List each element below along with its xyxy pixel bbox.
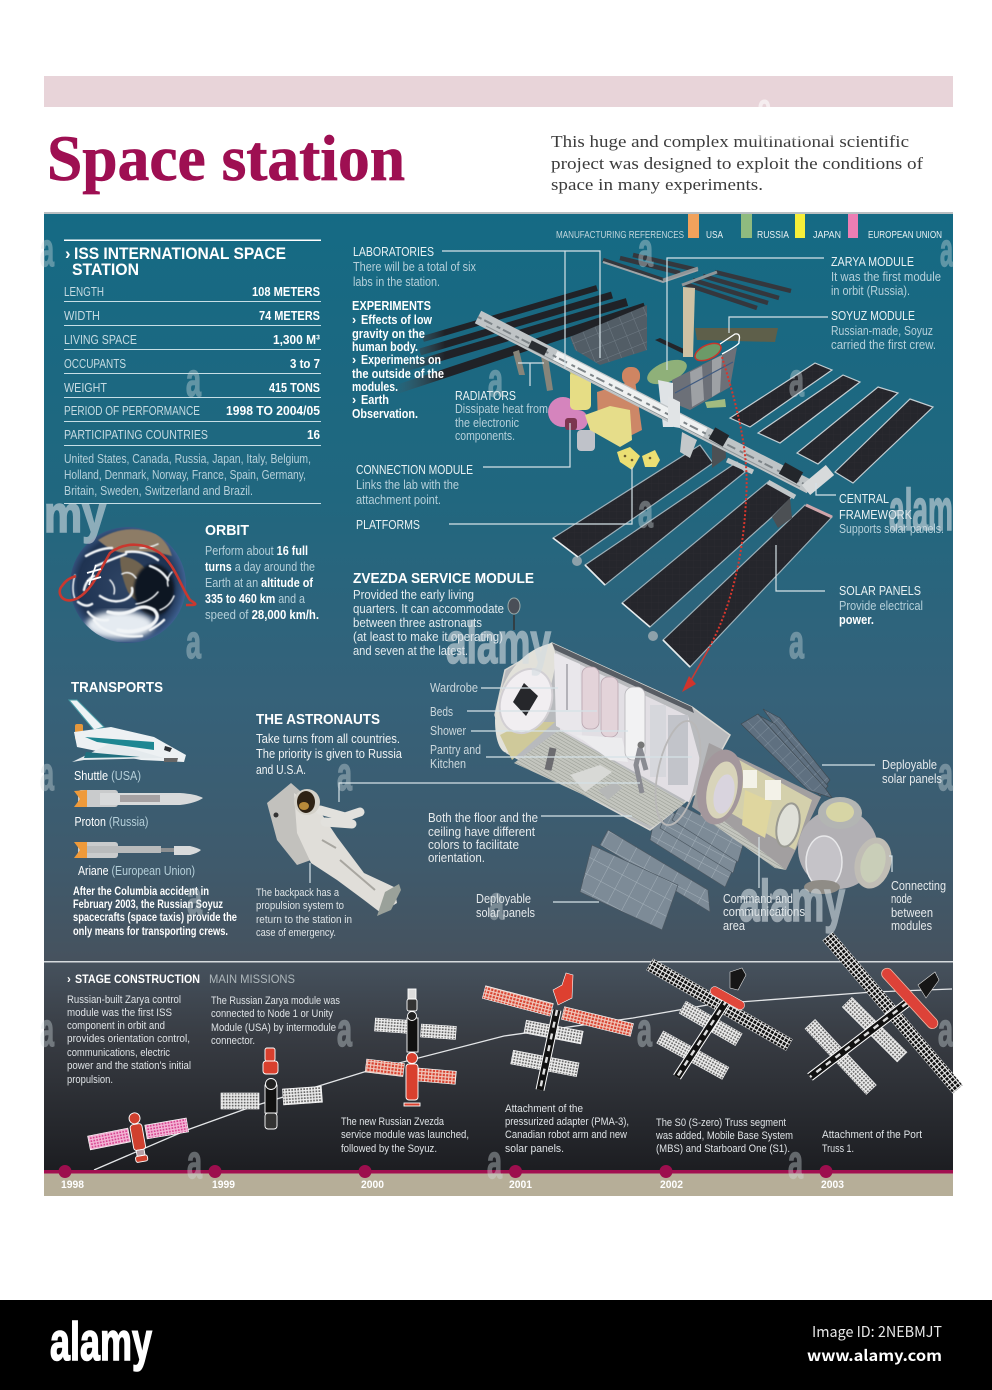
text: 2003 mission — [822, 1129, 922, 1155]
Zvezda labels and leaders: Wardrobe — [430, 681, 478, 695]
legend: manufacturing references: MANUFACTURING REFERENCES — [556, 230, 684, 241]
year labels: 1998 — [61, 1179, 84, 1191]
label: platforms: PLATFORMS — [356, 517, 420, 532]
mast — [683, 287, 695, 357]
label: experiments: › — [352, 313, 356, 327]
label: solar panels: SOLAR PANELS — [839, 583, 921, 598]
year labels — [61, 1179, 844, 1191]
astronauts heading and text: THE ASTRONAUTS — [256, 711, 380, 728]
label: Zvezda heading and text: between three astronauts — [353, 616, 482, 630]
watermarks: a — [938, 1003, 953, 1056]
label: radiators: Dissipate heat from — [455, 402, 548, 416]
astronauts heading and text: and U.S.A. — [256, 763, 306, 777]
label: connecting node: modules — [891, 919, 932, 933]
label: experiments — [352, 299, 444, 421]
astronauts heading and text: Take turns from all countries. — [256, 732, 400, 746]
length row: 108 METERS — [252, 285, 320, 299]
countries row — [64, 428, 320, 442]
label: connection module: CONNECTION MODULE — [356, 462, 473, 477]
text: backpack: The backpack has a — [256, 887, 340, 899]
icon: ISS marker — [87, 565, 101, 585]
array connectors — [712, 436, 792, 528]
watermarks: a — [757, 82, 772, 135]
mini station 2002 — [646, 959, 792, 1079]
text: Columbia note: February 2003, the Russian Soyuz — [73, 899, 223, 911]
text: 2000 mission: The new Russian Zvezda — [341, 1116, 445, 1128]
legend: manufacturing references: EUROPEAN UNION — [868, 230, 942, 241]
shower — [625, 687, 645, 760]
label: experiments: the outside of the — [352, 367, 444, 381]
label: experiments: › — [352, 393, 356, 407]
astronaut leader lines — [310, 783, 640, 883]
watermarks: a — [637, 1003, 652, 1056]
label: floor and ceiling — [428, 811, 538, 865]
watermarks: a — [187, 871, 202, 924]
label: Zvezda heading and text: ZVEZDA SERVICE MODULE — [353, 570, 534, 587]
label: connecting node — [891, 879, 946, 933]
occupants row: 3 to 7 — [290, 357, 320, 371]
label: soyuz: Russian-made, Soyuz — [831, 324, 933, 338]
label: shuttle: Shuttle (USA) — [74, 769, 141, 783]
transports heading: TRANSPORTS — [71, 679, 163, 696]
label: connecting node: Connecting — [891, 879, 946, 893]
living space row: 1,300 M³ — [273, 333, 320, 347]
countries row: 16 — [307, 428, 320, 442]
watermarks: a — [638, 223, 653, 276]
intro text: space in many experiments. — [551, 175, 763, 194]
text: 1999 mission — [211, 995, 340, 1047]
connecting node — [798, 797, 897, 894]
starboard lower solar arrays — [553, 445, 832, 667]
orbit text: Earth at an altitude of — [205, 576, 314, 590]
Zvezda labels and leaders: Pantry and — [430, 743, 481, 757]
Zvezda labels and leaders: Shower — [430, 724, 466, 738]
table heading: › — [65, 245, 70, 263]
weight row: WEIGHT — [64, 381, 107, 395]
label: solar panels: Provide electrical — [839, 599, 923, 613]
mission timeline curve — [94, 989, 952, 1170]
text: 2003 mission: Truss 1. — [822, 1143, 854, 1155]
label: floor and ceiling: colors to facilitate — [428, 838, 519, 852]
label: Zvezda heading and text: Provided the early living — [353, 588, 474, 602]
Zvezda labels and leaders: Beds — [430, 705, 453, 719]
orbit text: speed of 28,000 km/h. — [205, 608, 319, 622]
label: zarya: ZARYA MODULE — [831, 254, 914, 269]
length row: LENGTH — [64, 285, 104, 299]
upper deployable solar panels — [741, 709, 832, 798]
small seated figure — [548, 748, 553, 770]
text: 1999 mission: The Russian Zarya module was — [211, 995, 340, 1007]
starboard upper solar arrays — [730, 363, 933, 483]
watermarks: alamy — [446, 611, 551, 676]
label: radiators: components. — [455, 429, 515, 443]
header band — [44, 76, 953, 107]
text: Columbia note: spacecrafts (space taxis) provide the — [73, 912, 237, 924]
stage construction heading — [67, 972, 295, 986]
orbit path — [60, 545, 195, 605]
watermarks: a — [789, 353, 804, 406]
floor — [514, 730, 685, 827]
label: zarya: It was the first module — [831, 270, 941, 284]
text: 1999 mission: Module (USA) by intermodule — [211, 1022, 336, 1034]
label: central framework: CENTRAL — [839, 491, 889, 506]
length row — [64, 285, 320, 299]
label: laboratories: LABORATORIES — [353, 244, 434, 259]
Zarya green module — [644, 355, 690, 389]
label: Zvezda heading and text: and seven at the latest. — [353, 644, 468, 658]
label: deployable panels lower: solar panels — [476, 906, 535, 920]
watermarks: a — [40, 747, 54, 800]
text: 2000 mission: followed by the Soyuz. — [341, 1143, 437, 1155]
floor tables — [570, 765, 612, 792]
watermarks: a — [940, 223, 953, 276]
label: Zvezda heading and text: quarters. It can accommodate — [353, 602, 504, 616]
watermarks: a — [40, 223, 54, 276]
watermarks: my — [44, 486, 106, 544]
text: 1998 mission: propulsion. — [67, 1074, 113, 1086]
table heading — [65, 245, 286, 279]
radiators — [513, 350, 553, 391]
countries row: PARTICIPATING COUNTRIES — [64, 428, 208, 442]
text: backpack: case of emergency. — [256, 927, 336, 939]
period row — [64, 404, 320, 418]
smudge over intro — [723, 130, 847, 140]
label: experiments: human body. — [352, 340, 418, 354]
watermarks: a — [488, 353, 503, 406]
orbit text — [205, 522, 319, 622]
watermarks: alamy — [739, 869, 845, 934]
table heading: STATION — [72, 261, 139, 279]
text: backpack: propulsion system to — [256, 900, 344, 912]
label: soyuz: carried the first crew. — [831, 338, 936, 352]
width row: WIDTH — [64, 309, 100, 323]
label: zarya — [831, 254, 941, 298]
label: radiators: RADIATORS — [455, 388, 516, 403]
footer image id — [807, 1321, 942, 1366]
back panels — [695, 328, 778, 342]
text: 1999 mission: connected to Node 1 or Unity — [211, 1008, 333, 1020]
label: central framework — [839, 491, 944, 536]
text: 2001 mission: solar panels. — [505, 1143, 564, 1155]
label: Zvezda heading and text: (at least to make it operating) — [353, 630, 503, 644]
icon: ariane rocket — [74, 842, 201, 858]
label: connection module: attachment point. — [356, 493, 441, 507]
intro text — [551, 132, 923, 194]
footer logo: alamy — [50, 1312, 152, 1372]
label: deployable panels right: solar panels — [882, 772, 942, 786]
label: laboratories — [353, 244, 477, 289]
year labels: 1999 — [212, 1179, 235, 1191]
text: Columbia note: only means for transporting crews. — [73, 926, 228, 938]
beds — [582, 667, 618, 737]
red dotted guide with arrow — [682, 357, 747, 692]
footer image id: Image ID: 2NEBMJT — [812, 1321, 942, 1342]
end cap — [495, 643, 556, 753]
top solar arrays — [603, 255, 791, 308]
Soyuz module highlight — [692, 340, 724, 364]
label: floor and ceiling: orientation. — [428, 851, 485, 865]
label: experiments: modules. — [352, 380, 398, 394]
label: central framework: Supports solar panels. — [839, 522, 944, 536]
ISS station illustration — [395, 255, 933, 692]
label: floor and ceiling: ceiling have different — [428, 825, 535, 839]
icon: small probe — [508, 598, 520, 630]
lower deployable solar panels — [580, 805, 745, 930]
text: 1998 mission — [67, 994, 191, 1086]
watermarks: a — [489, 876, 504, 929]
ring joint — [647, 717, 709, 829]
orbit text: ORBIT — [205, 522, 249, 539]
label: soyuz — [831, 308, 936, 352]
orbit text: 335 to 460 km and a — [205, 592, 305, 606]
legend: manufacturing references: RUSSIA — [757, 230, 789, 241]
label: experiments: Observation. — [352, 407, 418, 421]
label: experiments: Earth — [361, 393, 389, 407]
mini station 2000 — [365, 989, 456, 1106]
mini station 2003 — [805, 932, 963, 1095]
stage section divider — [44, 961, 953, 962]
mini station 1998 — [88, 1112, 189, 1163]
Zvezda service module cutaway — [490, 643, 897, 930]
array joints — [572, 556, 658, 641]
laboratory modules — [548, 366, 660, 470]
label: solar panels: power. — [839, 613, 874, 627]
astronauts heading and text — [256, 711, 402, 777]
country list: United States, Canada, Russia, Japan, Italy, Belgium, — [64, 452, 311, 466]
label: experiments: EXPERIMENTS — [352, 299, 431, 313]
text: 1998 mission: communications, electric — [67, 1047, 170, 1059]
width row: 74 METERS — [259, 309, 320, 323]
watermarks: a — [788, 1135, 803, 1188]
text: 2002 mission: The S0 (S-zero) Truss segment — [656, 1117, 786, 1129]
label: connection module — [356, 462, 473, 507]
orbit text: Perform about 16 full — [205, 544, 308, 558]
year markers — [58, 1165, 832, 1178]
period row: PERIOD OF PERFORMANCE — [64, 404, 200, 418]
label: Zvezda heading and text — [353, 570, 534, 658]
mini station 2001 — [482, 973, 634, 1090]
country list: Britain, Sweden, Switzerland and Brazil. — [64, 484, 253, 498]
text: 1998 mission: component in orbit and — [67, 1020, 165, 1032]
label: solar panels — [839, 583, 923, 627]
label: command area: area — [723, 919, 745, 933]
text: 1998 mission: module was the first ISS — [67, 1007, 172, 1019]
occupants row — [64, 357, 320, 371]
label: radiators — [455, 388, 548, 443]
Zvezda labels and leaders — [430, 681, 892, 902]
country list: Holland, Denmark, Norway, France, Spain, Germany, — [64, 468, 306, 482]
label: connection module: Links the lab with the — [356, 478, 459, 492]
watermarks: a — [337, 747, 352, 800]
text: Columbia note — [73, 886, 237, 938]
main truss — [478, 317, 832, 517]
year labels: 2002 — [660, 1179, 683, 1191]
watermarks: a — [40, 1003, 54, 1056]
watermarks: a — [487, 1135, 502, 1188]
label: deployable panels lower: Deployable — [476, 892, 531, 906]
width row — [64, 309, 320, 323]
title: Space station — [47, 123, 405, 195]
wardrobe — [554, 653, 582, 740]
Zvezda labels and leaders: Kitchen — [430, 757, 466, 771]
label: zarya: in orbit (Russia). — [831, 284, 910, 298]
label: experiments: gravity on the — [352, 327, 425, 341]
label: radiators: the electronic — [455, 416, 519, 430]
label: central framework: FRAMEWORK — [839, 507, 912, 522]
label: soyuz: SOYUZ MODULE — [831, 308, 915, 323]
text: Columbia note: After the Columbia accident in — [73, 886, 209, 898]
text: 1998 mission: provides orientation control, — [67, 1033, 190, 1045]
table heading: ISS INTERNATIONAL SPACE — [74, 245, 286, 263]
footer bar — [0, 1300, 992, 1390]
label: command area — [723, 892, 805, 933]
text: 2001 mission: pressurized adapter (PMA-3), — [505, 1116, 629, 1128]
year labels: 2003 — [821, 1179, 844, 1191]
text: 2000 mission: service module was launched, — [341, 1129, 469, 1141]
astronauts heading and text: The priority is given to Russia — [256, 747, 402, 761]
astronaut — [267, 783, 401, 916]
watermarks: a — [186, 353, 201, 406]
watermarks: a — [789, 615, 804, 668]
text: 1999 mission: connector. — [211, 1035, 255, 1047]
panel top rule — [44, 212, 953, 214]
label: command area: Command and — [723, 892, 793, 906]
label: command area: communications — [723, 905, 805, 919]
living space row: LIVING SPACE — [64, 333, 137, 347]
label: deployable panels right — [882, 758, 942, 786]
label: experiments: › — [352, 353, 356, 367]
label: laboratories: There will be a total of six — [353, 260, 477, 274]
text: backpack: return to the station in — [256, 914, 352, 926]
leader lines for ISS — [442, 251, 836, 591]
text: 2002 mission: was added, Mobile Base System — [655, 1130, 793, 1142]
label: connecting node: between — [891, 906, 933, 920]
label: ariane: Ariane (European Union) — [78, 864, 195, 878]
watermarks: a — [337, 1003, 352, 1056]
legend: manufacturing references: USA — [706, 230, 723, 241]
orbit text: turns a day around the — [205, 560, 315, 574]
text: 2002 mission: (MBS) and Starboard One (S1). — [656, 1143, 790, 1155]
icon: proton rocket — [74, 790, 203, 807]
main cylinder — [495, 643, 730, 830]
watermarks — [40, 82, 953, 1188]
text: 2003 mission: Attachment of the Port — [822, 1129, 922, 1141]
label: deployable panels right: Deployable — [882, 758, 937, 772]
label: deployable panels lower — [476, 892, 535, 920]
legend: manufacturing references — [556, 214, 942, 241]
period row: 1998 TO 2004/05 — [226, 404, 320, 418]
main panel background — [44, 213, 953, 1173]
watermarks: a — [938, 747, 953, 800]
intro text: project was designed to exploit the conditions of — [551, 154, 923, 173]
label: connecting node: node — [891, 892, 912, 906]
intro text: This huge and complex multinational scientific — [551, 132, 910, 151]
text: 2001 mission: Canadian robot arm and new — [505, 1129, 627, 1141]
icon: Earth with orbit — [60, 527, 195, 643]
text: backpack — [256, 887, 352, 939]
stage construction heading: STAGE CONSTRUCTION — [75, 974, 200, 986]
text: 2002 mission — [655, 1117, 793, 1155]
weight row: 415 TONS — [269, 381, 320, 395]
year labels: 2001 — [509, 1179, 532, 1191]
watermarks: a — [186, 615, 201, 668]
port gray panel block — [570, 305, 647, 365]
text: 2000 mission — [341, 1116, 469, 1155]
label: experiments: Effects of low — [361, 313, 432, 327]
label: laboratories: labs in the station. — [353, 275, 440, 289]
watermarks: a — [638, 484, 653, 537]
label: experiments: Experiments on — [361, 353, 441, 367]
footer image id: www.alamy.com — [807, 1345, 942, 1366]
weight row — [64, 381, 320, 395]
stage construction heading: › — [67, 974, 71, 986]
year labels: 2000 — [361, 1179, 384, 1191]
port solar arrays — [395, 288, 645, 390]
icon: shuttle — [69, 700, 186, 762]
timeline base — [44, 1165, 953, 1196]
occupants row: OCCUPANTS — [64, 357, 126, 371]
legend: manufacturing references: JAPAN — [813, 230, 841, 241]
figure — [636, 748, 646, 793]
stage construction heading: MAIN MISSIONS — [209, 972, 295, 986]
living space row — [64, 333, 320, 347]
text: 1998 mission: Russian-built Zarya control — [67, 994, 181, 1006]
mini station 1999 — [221, 1048, 322, 1129]
label: floor and ceiling: Both the floor and the — [428, 811, 538, 825]
text: 2001 mission — [505, 1103, 629, 1155]
second section — [692, 743, 821, 870]
label: proton: Proton (Russia) — [74, 815, 148, 829]
watermarks: a — [187, 1135, 202, 1188]
text: 2001 mission: Attachment of the — [505, 1103, 583, 1115]
panel: ISS facts table — [64, 240, 321, 504]
text: 1998 mission: power and the station's initial — [67, 1060, 191, 1072]
country list — [64, 452, 311, 498]
gray Russian panels — [672, 347, 737, 410]
